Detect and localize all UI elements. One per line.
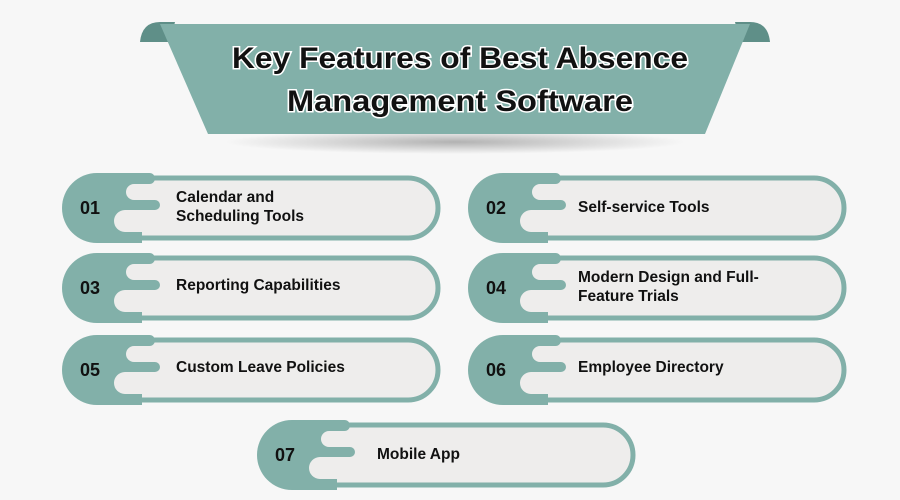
card 01: Calendar and	[176, 189, 274, 206]
card 02	[468, 173, 844, 243]
card 07	[257, 420, 633, 490]
card 06: Employee Directory	[578, 359, 724, 376]
card 04: Feature Trials	[578, 288, 679, 305]
card 01	[62, 173, 438, 243]
card 07: Mobile App	[377, 446, 460, 463]
card 06: 06	[486, 360, 506, 380]
title: Key Features of Best Absence	[232, 42, 688, 75]
card 04: 04	[486, 278, 506, 298]
title: Management Software	[287, 85, 633, 118]
card 07: 07	[275, 445, 295, 465]
card 03	[62, 253, 438, 323]
card 04	[468, 253, 844, 323]
card 02: 02	[486, 198, 506, 218]
card 05: Custom Leave Policies	[176, 359, 345, 376]
card 04: Modern Design and Full-	[578, 269, 759, 286]
title	[232, 42, 688, 118]
card 01: Scheduling Tools	[176, 208, 304, 225]
banner	[140, 22, 770, 154]
card 05: 05	[80, 360, 100, 380]
card 06	[468, 335, 844, 405]
card 05	[62, 335, 438, 405]
card 01: 01	[80, 198, 100, 218]
card 03: Reporting Capabilities	[176, 277, 340, 294]
card 03: 03	[80, 278, 100, 298]
card 02: Self-service Tools	[578, 199, 710, 216]
